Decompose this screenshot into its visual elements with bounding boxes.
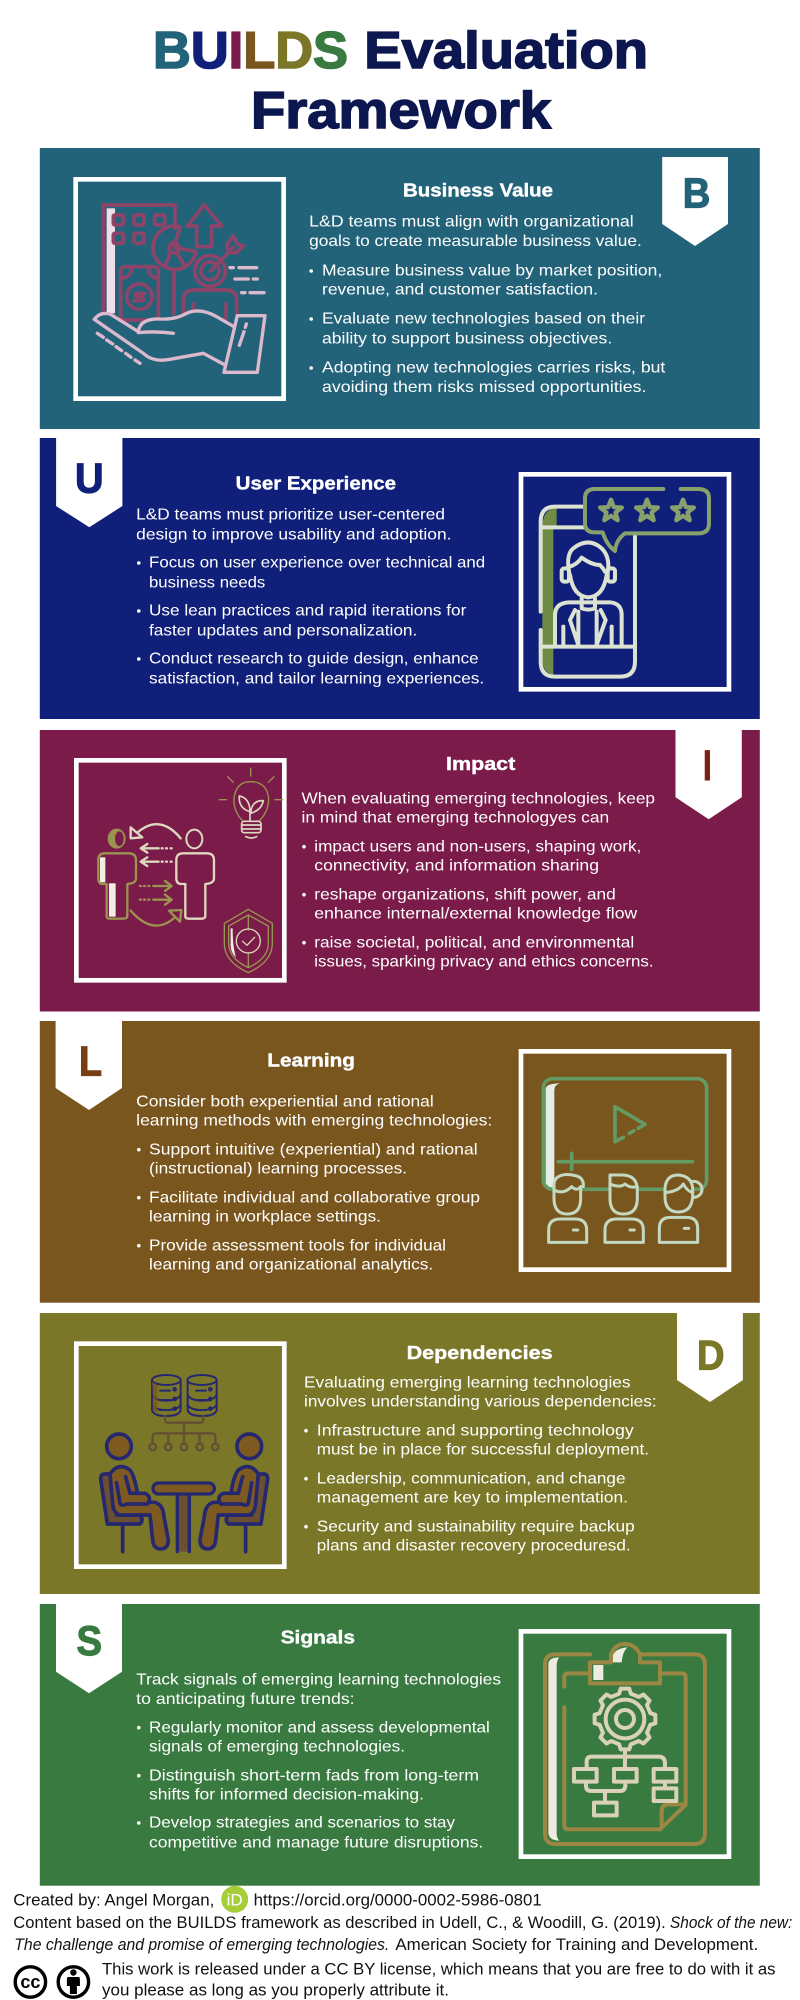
- ORCID url: https://orcid.org/0000-0002-5986-0801: [254, 1891, 542, 1909]
- bullet: users: [302, 838, 641, 874]
- badge: B: B: [683, 169, 710, 216]
- badge: U: U: [75, 455, 104, 502]
- bullet: research: [137, 651, 484, 687]
- bullet: leadership: Leadership, communication, and change: [317, 1470, 626, 1487]
- bullet: leadership: management are key to implementation.: [317, 1489, 628, 1506]
- panel: Impact: [40, 730, 760, 1012]
- bullet: business objectives: ability to support business objectives.: [322, 330, 612, 347]
- panel: Signals: [40, 1604, 760, 1886]
- bullet: business objectives: [309, 311, 646, 347]
- footer: credits: Created by: Angel Morgan,: [13, 1891, 214, 1909]
- bullet: organizations: reshape organizations, shift power, and: [314, 886, 616, 903]
- icon: ORCID iD: iD: [227, 1890, 243, 1910]
- icon: CC license: cc: [20, 1972, 40, 1992]
- footer: source citation: [13, 1914, 792, 1954]
- bullet: market position: Measure business value by market position,: [322, 262, 662, 279]
- footer: source citation: Content based on the BUILDS framework as described in Udell, C., & Woodill, G. (2019).: [13, 1914, 666, 1932]
- heading: User Experience: [236, 472, 396, 493]
- bullet: market position: revenue, and customer satisfaction.: [322, 282, 598, 299]
- panel: Business Value: [40, 148, 760, 429]
- bullet: assessment: learning and organizational analytics.: [149, 1256, 433, 1273]
- footer: credits: [13, 1886, 542, 1913]
- bullet: monitor: [137, 1719, 490, 1755]
- bullet: collaborative: learning in workplace settings.: [149, 1208, 381, 1225]
- bullet: assessment: [137, 1237, 446, 1273]
- bullet: security: [304, 1518, 635, 1554]
- heading: Dependencies: [407, 1342, 553, 1363]
- title: [153, 22, 648, 140]
- badge: L: L: [79, 1038, 102, 1085]
- bullet: market position: [309, 262, 662, 299]
- icon: people at table with databases: [76, 1344, 284, 1567]
- bullet: intuitive: [137, 1141, 478, 1177]
- bullet: society: [302, 934, 654, 970]
- intro text: Track signals of emerging learning technologies: [136, 1671, 501, 1688]
- bullet: research: Conduct research to guide design, enhance: [149, 651, 479, 668]
- badge: I: I: [703, 742, 712, 790]
- title: BUILDS: [153, 22, 348, 80]
- bullet: infrastructure: must be in place for successful deployment.: [317, 1441, 649, 1458]
- icon: people exchanging, bulb and shield: [76, 760, 284, 980]
- footer: license text: you please as long as you properly attribute it.: [102, 1981, 449, 1999]
- badge: I: [676, 730, 742, 819]
- intro text: Consider both experiential and rational: [136, 1093, 434, 1110]
- bullet: security: Security and sustainability require backup: [317, 1518, 635, 1535]
- bullet: fads: shifts for informed decision-making.: [149, 1786, 424, 1803]
- right sitter: [200, 1434, 268, 1552]
- icon: clipboard with gear and flowchart: [521, 1631, 729, 1857]
- panel: Learning: [40, 1021, 760, 1303]
- title: Framework: [251, 82, 551, 140]
- title: Evaluation: [364, 22, 648, 80]
- bullet: society: raise societal, political, and environmental: [314, 934, 634, 951]
- intro text: [136, 1671, 501, 1708]
- bullet: leadership: [304, 1470, 628, 1506]
- intro text: [136, 506, 451, 543]
- bullet: infrastructure: Infrastructure and supporting technology: [317, 1422, 634, 1439]
- bullet: users: connectivity, and information sharing: [314, 857, 599, 874]
- bullet: assessment: Provide assessment tools for individual: [149, 1237, 446, 1254]
- heading: Business Value: [403, 180, 553, 201]
- icon: CC license: [15, 1967, 46, 1997]
- bullet: lean practices: Use lean practices and rapid iterations for: [149, 603, 467, 620]
- bullet: organizations: enhance internal/external knowledge flow: [314, 905, 638, 922]
- bullet: user focus: [137, 555, 485, 591]
- heading: Learning: [267, 1050, 355, 1071]
- bullet: user focus: business needs: [149, 574, 265, 591]
- badge: D: [677, 1313, 743, 1402]
- bullet: strategies: [137, 1815, 483, 1851]
- bullet: user focus: Focus on user experience over technical and: [149, 555, 485, 572]
- footer: license text: This work is released under a CC BY license, which means that you are free to do with it as: [102, 1960, 776, 1978]
- intro text: involves understanding various dependencies:: [304, 1393, 657, 1410]
- bullet: security: plans and disaster recovery proceduresd.: [317, 1537, 631, 1554]
- bullet: intuitive: (instructional) learning processes.: [149, 1160, 407, 1177]
- panel: User Experience: [40, 438, 760, 719]
- intro text: When evaluating emerging technologies, keep: [302, 790, 655, 807]
- intro text: goals to create measurable business value.: [309, 233, 642, 250]
- intro text: to anticipating future trends:: [136, 1691, 355, 1708]
- bullet: intuitive: Support intuitive (experiential) and rational: [149, 1141, 478, 1158]
- bullet: business objectives: Evaluate new technologies based on their: [322, 311, 646, 328]
- intro text: Evaluating emerging learning technologies: [304, 1374, 631, 1391]
- bullet: fads: Distinguish short-term fads from long-term: [149, 1767, 479, 1784]
- panel: Dependencies: [40, 1313, 760, 1594]
- icon: BY attribution: [58, 1967, 89, 1997]
- intro text: [136, 1093, 492, 1129]
- bullet: collaborative: Facilitate individual and collaborative group: [149, 1189, 480, 1206]
- icon: phone with star rating: [521, 474, 729, 689]
- footer: source citation: American Society for Training and Development.: [395, 1936, 758, 1954]
- bullet: lean practices: faster updates and personalization.: [149, 622, 417, 639]
- bullet: fads: [137, 1767, 479, 1803]
- intro text: in mind that emerging technologyes can: [302, 809, 609, 826]
- badge: D: D: [697, 1332, 724, 1379]
- heading: Signals: [281, 1627, 355, 1648]
- bullet: strategies: competitive and manage future disruptions.: [149, 1834, 483, 1851]
- icon: ORCID iD: [221, 1886, 248, 1913]
- bullet: lean practices: [137, 603, 467, 639]
- bullet: monitor: signals of emerging technologies.: [149, 1738, 405, 1755]
- right person: [176, 830, 214, 919]
- bullet: risks: Adopting new technologies carries risks, but: [322, 360, 666, 377]
- badge: B: [662, 157, 728, 246]
- icon: video screen with audience: [521, 1051, 729, 1270]
- bullet: research: satisfaction, and tailor learning experiences.: [149, 670, 484, 687]
- badge: S: S: [76, 1617, 102, 1664]
- bullet: organizations: [302, 886, 638, 922]
- left person: [98, 830, 136, 919]
- intro text: [302, 790, 655, 826]
- bullet: collaborative: [137, 1189, 480, 1225]
- intro text: [309, 214, 642, 250]
- intro text: [304, 1374, 657, 1410]
- table: [153, 1483, 214, 1552]
- footer: source citation: The challenge and promise of emerging technologies.: [14, 1936, 389, 1954]
- bullet: risks: avoiding them risks missed opportunities.: [322, 379, 646, 396]
- footer: license text: [102, 1960, 776, 1999]
- intro text: L&D teams must prioritize user-centered: [136, 506, 445, 523]
- left sitter: [101, 1434, 168, 1552]
- bullet: strategies: Develop strategies and scenarios to stay: [149, 1815, 455, 1832]
- intro text: learning methods with emerging technologies:: [136, 1112, 492, 1129]
- intro text: L&D teams must align with organizational: [309, 214, 634, 231]
- heading: Impact: [446, 753, 515, 774]
- bullet: society: issues, sparking privacy and ethics concerns.: [314, 953, 654, 970]
- bullet: risks: [309, 360, 666, 396]
- badge: L: [56, 1021, 122, 1110]
- intro text: design to improve usability and adoption.: [136, 526, 451, 543]
- bullet: users: impact users and non-users, shaping work,: [314, 838, 641, 855]
- bullet: infrastructure: [304, 1422, 649, 1458]
- badge: S: [56, 1604, 122, 1693]
- bullet: monitor: Regularly monitor and assess developmental: [149, 1719, 490, 1736]
- footer: source citation: Shock of the new:: [670, 1914, 792, 1932]
- icon: hand holding business value: [76, 179, 284, 399]
- badge: U: [56, 438, 122, 527]
